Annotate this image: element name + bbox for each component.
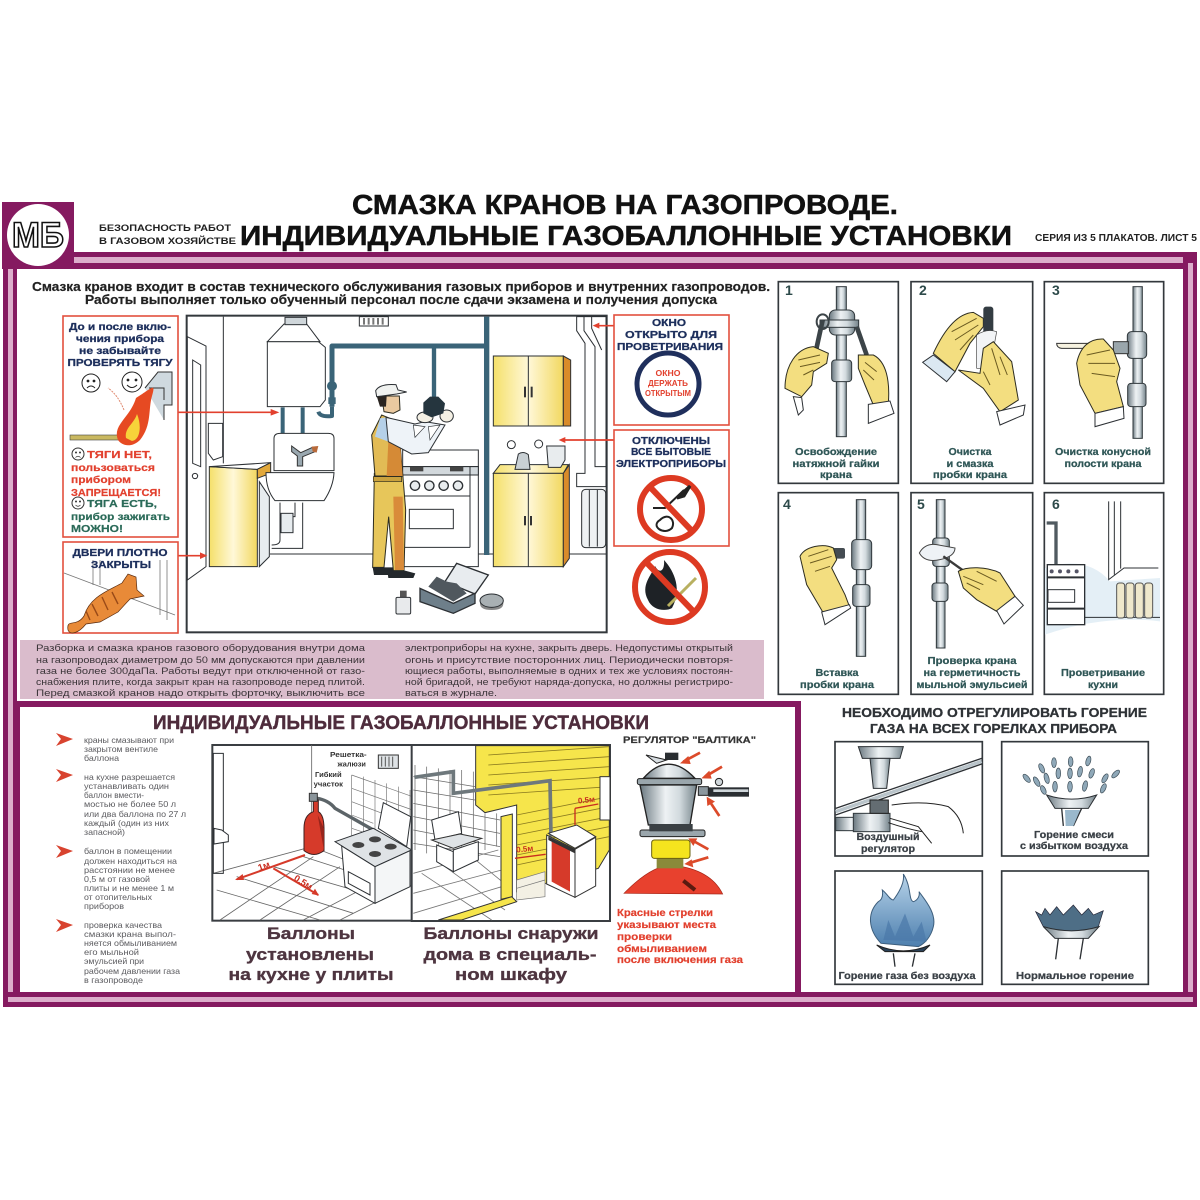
- cylinder top: [624, 865, 723, 894]
- text block: procedure notes: электроприборы на кухне, закрыть дверь. Недопустимы открытый: [405, 643, 733, 653]
- bullet 2: устанавливать один: [84, 781, 169, 791]
- title: ИНДИВИДУАЛЬНЫЕ ГАЗОБАЛЛОННЫЕ УСТАНОВКИ: [240, 220, 1012, 251]
- bullet 3: [56, 845, 177, 911]
- icon: happy face: [122, 372, 142, 392]
- sink: [266, 433, 334, 548]
- note: draught present: ТЯГА ЕСТЬ,: [87, 498, 157, 510]
- step captions 4-6: 4: [783, 496, 791, 512]
- series label: БЕЗОПАСНОСТЬ РАБОТ: [99, 223, 231, 234]
- step captions 4-6: 6: [1052, 496, 1060, 512]
- intro text: Смазка кранов входит в состав технического обслуживания газовых приборов и внутренних газопроводов.: [32, 280, 770, 294]
- note: draught present: МОЖНО!: [71, 523, 123, 535]
- bullet 1: [56, 733, 174, 763]
- stove: [403, 450, 478, 567]
- step captions 4-6: на герметичность: [924, 668, 1020, 679]
- stove: [335, 803, 412, 903]
- bullet 3: баллон в помещении: [84, 846, 172, 856]
- step captions 4-6: пробки крана: [800, 679, 874, 691]
- burner heading: [842, 705, 1147, 736]
- callout: appliances off: ЭЛЕКТРОПРИБОРЫ: [616, 458, 726, 470]
- step captions 1-3: 1: [785, 282, 793, 298]
- burner: no air: [835, 871, 982, 984]
- hose label: [314, 770, 343, 788]
- step 6: [1044, 493, 1164, 694]
- bullet 2: или два баллона по 27 л: [84, 809, 186, 819]
- warning: no draught: [71, 448, 161, 499]
- distance arrows: 0.5м: [292, 873, 314, 892]
- illustration: Baltika regulator: [624, 753, 749, 894]
- wall towel: [208, 423, 223, 460]
- step captions 1-3: и смазка: [946, 459, 994, 470]
- bullet 4: [56, 919, 180, 985]
- bullet 3: расстоянии не менее: [84, 865, 175, 875]
- regulator note: проверки: [617, 931, 672, 943]
- intro text: Работы выполняет только обученный персонал после сдачи экзамена и получения допуска: [85, 293, 718, 307]
- panel: kitchen illustration: [173, 316, 615, 632]
- bullet 4: рабочем давлении газа: [84, 966, 180, 976]
- step captions 1-3: натяжной гайки: [792, 459, 880, 470]
- step captions 4-6: 5: [917, 496, 925, 512]
- regulator note: [617, 907, 743, 966]
- caption: outdoor cylinders: Баллоны снаружи: [424, 924, 598, 943]
- icon: chimney hood: [145, 372, 172, 420]
- bullet 4: в газопроводе: [84, 975, 143, 985]
- note: draught present: прибор зажигать: [71, 511, 171, 523]
- regulator note: указывают места: [617, 919, 716, 931]
- bullet 3: должен находиться на: [84, 856, 177, 866]
- bullet 4: его мыльной: [84, 947, 139, 957]
- vent grille: [359, 317, 388, 326]
- toolbox: [420, 563, 488, 613]
- step captions 4-6: мыльной эмульсией: [916, 680, 1028, 691]
- bullet 1: краны смазывают при: [84, 735, 174, 745]
- door and shelf: [213, 753, 228, 873]
- bullet 1: баллона: [84, 753, 119, 763]
- bullet 2: [56, 769, 186, 837]
- yellow wall: [476, 746, 609, 892]
- door frame: [438, 814, 517, 920]
- bullet 4: смазки крана выпол-: [84, 929, 176, 939]
- burner heading: НЕОБХОДИМО ОТРЕГУЛИРОВАТЬ ГОРЕНИЕ: [842, 705, 1147, 720]
- hose label: участок: [314, 779, 343, 788]
- callout: door closed: [63, 542, 178, 633]
- door: [187, 337, 206, 580]
- callout: window open: [614, 315, 729, 425]
- vent label: [330, 750, 367, 768]
- burner heading: ГАЗА НА ВСЕХ ГОРЕЛКАХ ПРИБОРА: [870, 721, 1118, 736]
- step captions 1-3: Очистка: [948, 447, 992, 458]
- icon: keep window open sign: ОКНО: [656, 368, 681, 378]
- note: draught present: [71, 497, 171, 535]
- warning: no draught: пользоваться: [71, 462, 155, 474]
- panel: steps 4-6: [778, 493, 1164, 694]
- bullet 4: проверка качества: [84, 920, 162, 930]
- bullet 2: мостью не более 50 л: [84, 799, 176, 809]
- callout: door closed: ЗАКРЫТЫ: [91, 559, 151, 571]
- callout: draught check: ПРОВЕРЯТЬ ТЯГУ: [68, 357, 173, 369]
- step 1: [778, 282, 898, 483]
- icon: keep window open sign: ДЕРЖАТЬ: [648, 378, 688, 388]
- text block: procedure notes: снабжения плите, когда закрыт кран на газопроводе перед плитой.: [36, 677, 365, 687]
- gas pipeline: [414, 772, 551, 837]
- caption: kitchen cylinders: Баллоны: [267, 924, 355, 943]
- burner: excess air: [1002, 742, 1148, 856]
- icon: keep window open sign: [637, 353, 699, 415]
- caption: kitchen cylinders: установлены: [246, 945, 374, 964]
- regulator note: обмыливанием: [617, 943, 707, 955]
- step 5: [911, 493, 1033, 694]
- title: СМАЗКА КРАНОВ НА ГАЗОПРОВОДЕ.: [352, 189, 898, 220]
- icon: no appliances sign: [640, 478, 702, 540]
- gas hose: [317, 798, 373, 830]
- left cabinet: [209, 463, 271, 567]
- icon: match and flame: [70, 388, 153, 445]
- warning: no draught: прибором: [71, 474, 131, 486]
- stove: [432, 812, 482, 872]
- icon: no open flame sign: [635, 552, 705, 622]
- outlet fitting: [698, 778, 749, 797]
- burner captions: Воздушный: [856, 832, 920, 843]
- bullet 2: баллон вмести-: [84, 790, 144, 800]
- text block: procedure notes: ваться в журнале.: [405, 688, 497, 698]
- check arrows: [680, 753, 722, 867]
- callout: window open: ОКНО: [652, 317, 686, 329]
- logo: [2, 202, 74, 269]
- burner: air regulator: [835, 742, 982, 856]
- warning: no draught: ТЯГИ НЕТ,: [87, 449, 152, 461]
- caption: outdoor cylinders: ном шкафу: [455, 965, 568, 984]
- regulator label: РЕГУЛЯТОР "БАЛТИКА": [623, 735, 756, 746]
- intro text: [32, 280, 770, 307]
- logo: МБ: [12, 216, 64, 255]
- burner captions: Нормальное горение: [1016, 971, 1134, 982]
- text block: procedure notes: газа не более 300даПа. Работы ведут при отключенной от газо-: [36, 666, 365, 676]
- appliances: [507, 440, 565, 469]
- text block: procedure notes: ющиеся работы, выполняемые в одних и тех же условиях постоян-: [405, 666, 733, 676]
- hose label: Гибкий: [315, 770, 342, 779]
- burner: normal: [1002, 871, 1148, 984]
- caption: kitchen cylinders: на кухне у плиты: [228, 965, 394, 984]
- bullet 3: плиты и не менее 1 м: [84, 883, 174, 893]
- bullet 2: на кухне разрешается: [84, 772, 175, 782]
- bricks: [517, 872, 545, 900]
- burner captions: регулятор: [861, 844, 915, 855]
- yellow nut: [652, 840, 690, 858]
- upper cabinet: [493, 356, 571, 426]
- worker: [372, 384, 453, 578]
- bullet 2: запасной): [84, 827, 125, 837]
- step captions 4-6: Проветривание: [1061, 668, 1145, 679]
- text block: procedure notes: [20, 640, 764, 699]
- warning: no draught: ЗАПРЕЩАЕТСЯ!: [71, 487, 161, 499]
- callout: door closed: ДВЕРИ ПЛОТНО: [72, 547, 168, 559]
- step 3: [1044, 282, 1164, 483]
- callout: draught check: не забывайте: [79, 345, 161, 357]
- water heater: [267, 317, 337, 407]
- callout: appliances off: [614, 430, 729, 546]
- bullet 4: эмульсией при: [84, 956, 144, 966]
- step captions 1-3: полости крана: [1064, 459, 1142, 470]
- title: [240, 189, 1012, 251]
- regulator note: после включения газа: [617, 954, 743, 966]
- callout: appliances off: ОТКЛЮЧЕНЫ: [632, 435, 710, 447]
- caption: kitchen cylinders: [228, 924, 394, 984]
- bullet 4: няется обмыливанием: [84, 938, 177, 948]
- text block: procedure notes: ной бригадой, не требуют наряда-допуска, но должны регистриро-: [405, 677, 733, 687]
- illustration: cylinder in kitchen: [212, 745, 413, 921]
- text block: procedure notes: Разборка и смазка кранов газового оборудования внутри дома: [36, 643, 366, 653]
- panel: burners: [835, 742, 1148, 984]
- vent: [378, 755, 398, 768]
- text block: procedure notes: огонь и присутствие посторонних лиц. Периодически повторя-: [405, 655, 733, 665]
- distance arrows: 1м: [257, 859, 271, 873]
- step 2: [911, 282, 1033, 483]
- illustration: cylinder outdoors: [412, 745, 610, 921]
- icon: cat: [68, 574, 144, 633]
- icon: keep window open sign: ОТКРЫТЫМ: [645, 388, 691, 398]
- bullet 2: каждый (один из них: [84, 818, 170, 828]
- step captions 1-3: Освобождение: [795, 446, 877, 458]
- panel: steps 1-3: [778, 282, 1164, 483]
- series label: [99, 223, 236, 247]
- series number: СЕРИЯ ИЗ 5 ПЛАКАТОВ. ЛИСТ 5: [1035, 233, 1197, 244]
- gas pipes: [283, 317, 487, 555]
- step captions 1-3: крана: [820, 470, 852, 481]
- bullet 3: 0,5 м от газовой: [84, 874, 150, 884]
- grease bottle: [396, 591, 411, 614]
- distance marks: 0.5м: [577, 795, 595, 806]
- callout: draught check: чения прибора: [76, 333, 164, 345]
- icon: sad face: [82, 374, 100, 392]
- callout: window open: ОТКРЫТО ДЛЯ: [625, 329, 717, 341]
- window and radiator: [577, 317, 606, 548]
- step captions 1-3: Очистка конусной: [1055, 447, 1151, 458]
- step 4: [778, 493, 898, 694]
- text block: procedure notes: на газопроводах диаметром до 50 мм допускаются при давлении: [36, 655, 365, 665]
- burner captions: Горение смеси: [1034, 830, 1114, 841]
- step captions 1-3: 3: [1052, 282, 1060, 298]
- regulator body: [640, 785, 697, 825]
- caption: outdoor cylinders: [424, 924, 598, 984]
- distance arrows: [235, 855, 319, 896]
- distance marks: [515, 795, 598, 858]
- lower cabinet: [493, 465, 569, 567]
- distance marks: 0.5м: [516, 844, 534, 855]
- step captions 4-6: Проверка крана: [928, 656, 1017, 667]
- grease tin: [480, 594, 503, 610]
- series label: В ГАЗОВОМ ХОЗЯЙСТВЕ: [99, 235, 236, 247]
- gas cylinder: [304, 793, 324, 854]
- vent label: жалюзи: [337, 759, 366, 768]
- pointer arrows: [173, 323, 615, 559]
- caption: outdoor cylinders: дома в специаль-: [424, 945, 596, 964]
- bullet 3: приборов: [84, 901, 125, 911]
- step captions 4-6: кухни: [1088, 680, 1118, 691]
- page frame: [3, 252, 1197, 1007]
- text block: procedure notes: Перед смазкой кранов надо открыть форточку, выключить все: [36, 688, 365, 698]
- window: [600, 777, 610, 820]
- burner captions: Горение газа без воздуха: [838, 970, 976, 982]
- callout: draught check: [63, 316, 178, 537]
- burner captions: [838, 830, 1134, 982]
- step captions 4-6: [783, 496, 1145, 691]
- bullet 1: закрытом вентиле: [84, 744, 158, 754]
- step captions 1-3: пробки крана: [933, 469, 1007, 481]
- vent label: Решетка-: [330, 750, 367, 759]
- callout: draught check: До и после вклю-: [69, 321, 172, 333]
- callout: window open: ПРОВЕТРИВАНИЯ: [617, 341, 723, 353]
- burner captions: с избытком воздуха: [1020, 840, 1128, 852]
- step captions 1-3: [785, 282, 1151, 481]
- step captions 4-6: Вставка: [816, 668, 859, 679]
- panel: individual gas cylinder installations: [14, 701, 798, 994]
- regulator note: Красные стрелки: [617, 907, 713, 919]
- callout: appliances off: ВСЕ БЫТОВЫЕ: [631, 446, 711, 458]
- section heading: ИНДИВИДУАЛЬНЫЕ ГАЗОБАЛЛОННЫЕ УСТАНОВКИ: [153, 713, 649, 734]
- step captions 1-3: 2: [919, 282, 927, 298]
- bullet 3: от отопительных: [84, 892, 153, 902]
- outdoor cabinet: [547, 825, 596, 897]
